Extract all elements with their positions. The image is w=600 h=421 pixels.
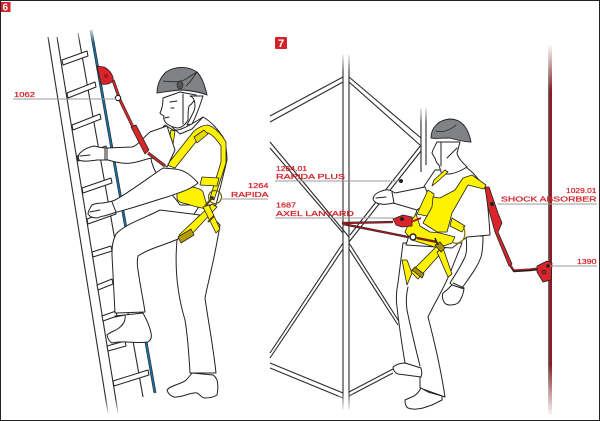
label: 1687 Axel Lanyard: 1687 — [276, 200, 296, 210]
front shoe — [107, 313, 151, 343]
head and neck — [432, 142, 467, 174]
label: 1264.01 Rapida Plus — [275, 164, 403, 183]
torso and sleeve — [406, 167, 490, 248]
worker on tower — [373, 119, 490, 409]
label: 1264 Rapida — [220, 181, 270, 199]
label: 1390 — [550, 257, 597, 266]
label: 1062: 1062 — [14, 90, 35, 99]
head — [160, 92, 196, 128]
Rapida lanyard and device 1062 — [97, 66, 165, 166]
label: 1029.01 Shock Absorber — [498, 186, 597, 204]
badge: panel 6: 6 — [2, 2, 8, 14]
badge: panel 6 — [1, 2, 10, 14]
worker on ladder — [78, 67, 227, 398]
torso — [150, 117, 227, 205]
badge: panel 7 — [275, 37, 287, 50]
ladder with blue rope — [40, 26, 160, 416]
harness straps — [165, 130, 175, 165]
waist pad — [177, 186, 208, 209]
label: 1029.01 Shock Absorber: 1029.01 — [566, 186, 596, 195]
shock absorber and device 1390 — [485, 187, 552, 282]
label: 1062 — [13, 90, 116, 99]
label: 1687 Axel Lanyard: AXEL LANYARD — [276, 209, 355, 218]
foot one — [393, 363, 422, 377]
badge: panel 7: 7 — [278, 38, 284, 50]
Axel lanyard and Rapida Plus device — [342, 215, 438, 245]
tower scaffold — [270, 52, 431, 412]
anchor rope on the wall — [546, 44, 554, 417]
label: 1264.01 Rapida Plus: 1264.01 — [276, 164, 307, 173]
label: 1264 Rapida: 1264 — [248, 181, 268, 190]
foot two — [405, 388, 442, 409]
lower arm and hand — [88, 168, 198, 218]
label: 1029.01 Shock Absorber: SHOCK ABSORBER — [501, 194, 597, 204]
helmet — [431, 119, 471, 142]
helmet — [157, 67, 207, 95]
legs — [396, 243, 462, 397]
hand — [442, 285, 464, 305]
extended arm and hand — [373, 187, 430, 210]
label: 1264.01 Rapida Plus: RAPIDA PLUS — [276, 172, 345, 181]
label: 1390: 1390 — [577, 257, 596, 266]
label: 1264 Rapida: RAPIDA — [231, 190, 270, 199]
right arm lower — [450, 236, 483, 288]
front bent leg — [112, 210, 200, 313]
back shoe — [167, 373, 218, 398]
back leg — [176, 205, 220, 373]
label: 1687 Axel Lanyard — [275, 200, 395, 218]
blue rope — [91, 30, 155, 393]
harness — [432, 170, 448, 186]
upper arm and hand — [78, 126, 175, 167]
